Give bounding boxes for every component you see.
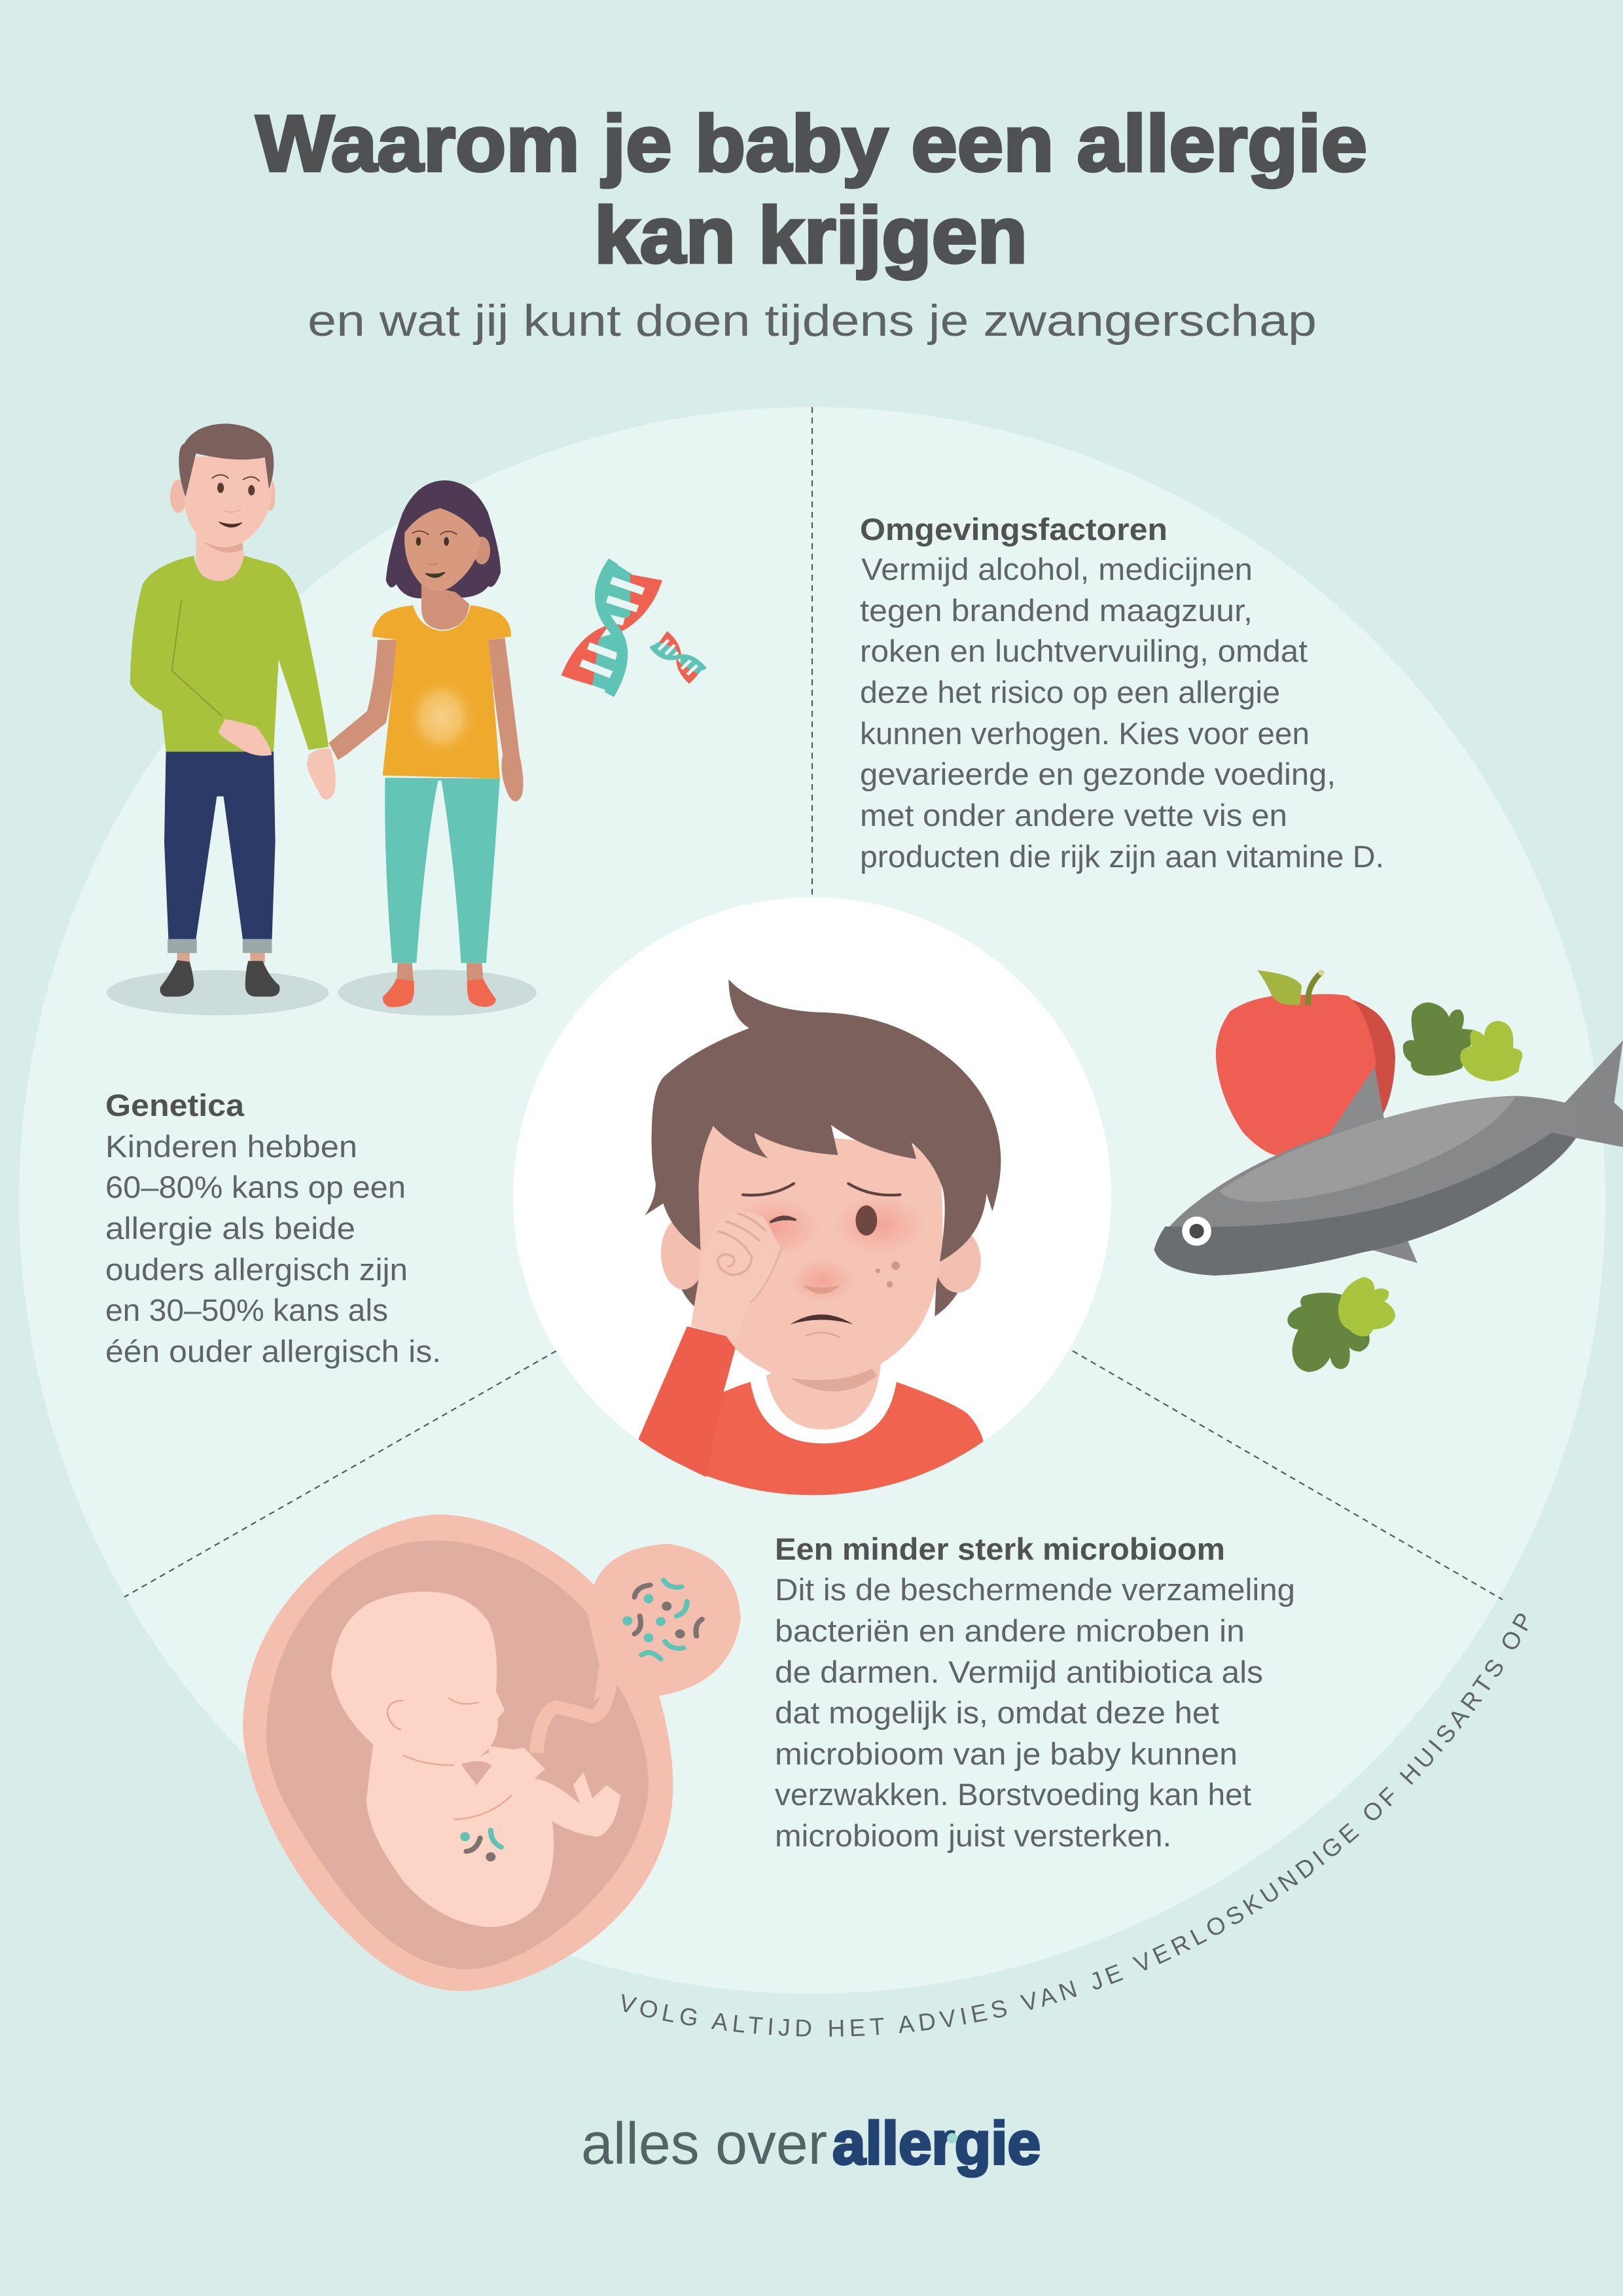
central white circle [513, 897, 1111, 1496]
fetus [331, 1592, 620, 1927]
text block: microbioom: microbioom van je baby kunnen [775, 1736, 1238, 1771]
face [698, 1126, 942, 1380]
microbes in bubble [622, 1580, 702, 1659]
womb inner [266, 1541, 649, 1969]
text block: Genetica: en 30–50% kans als [105, 1293, 388, 1327]
icon: large DNA [562, 560, 662, 694]
hair [645, 979, 1001, 1262]
large background circle [19, 407, 1605, 1994]
man [130, 423, 336, 997]
woman [329, 480, 523, 1007]
text block: Omgevingsfactoren: producten die rijk zijn aan vitamine D. [860, 839, 1384, 874]
eyebrows and eyes [743, 1183, 901, 1236]
hand [691, 1211, 781, 1339]
microbes in belly [460, 1830, 501, 1861]
text block: Genetica: één ouder allergisch is. [105, 1334, 441, 1369]
segment dividers [124, 407, 1503, 1600]
text block: microbioom: Een minder sterk microbioom [775, 1532, 1225, 1566]
logo: allergie [832, 2110, 1041, 2177]
text block: Omgevingsfactoren: deze het risico op een allergie [860, 675, 1280, 709]
text block: Omgevingsfactoren: tegen brandend maagzuur, [860, 593, 1253, 628]
text block: Genetica: allergie als beide [105, 1211, 355, 1246]
text block: microbioom: microbioom juist versterken. [775, 1818, 1171, 1853]
title: kan krijgen [594, 190, 1027, 279]
text block: microbioom: de darmen. Vermijd antibiotica als [775, 1655, 1263, 1689]
text block: Omgevingsfactoren [860, 512, 1384, 874]
text block: Omgevingsfactoren: Omgevingsfactoren [860, 512, 1168, 547]
text block: Omgevingsfactoren: roken en luchtvervuiling, omdat [860, 634, 1308, 668]
illustration: fetus in womb with microbiome [243, 1515, 741, 1991]
umbilical cord [536, 1684, 610, 1753]
illustration: food [1154, 970, 1623, 1372]
text block: Omgevingsfactoren: met onder andere vette vis en [860, 798, 1287, 833]
collar [724, 1354, 897, 1443]
nose and mouth [790, 1286, 853, 1337]
back hair [675, 1271, 965, 1316]
title [256, 99, 1367, 279]
ground shadows [107, 970, 537, 1016]
text block: Omgevingsfactoren: gevarieerde en gezonde voeding, [860, 757, 1336, 791]
illustration: boy rubbing eye [638, 979, 1001, 1495]
neck [764, 1362, 881, 1429]
text block: microbioom: bacteriën en andere microben in [775, 1613, 1245, 1648]
curved note: VOLG ALTIJD HET ADVIES VAN JE VERLOSKUNDIGE OF HUISARTS OP [622, 1613, 1527, 2037]
womb outer [243, 1515, 741, 1991]
irritated skin [729, 1196, 925, 1302]
ears [661, 1217, 981, 1293]
title: Waarom je baby een allergie [256, 99, 1367, 188]
red sweater [638, 1326, 984, 1495]
text block: microbioom: Dit is de beschermende verzameling [775, 1572, 1295, 1607]
apple [1216, 970, 1395, 1156]
herbs upper [1403, 1003, 1522, 1081]
icon: small DNA [642, 628, 713, 687]
text block: Genetica [105, 1088, 441, 1369]
illustration: parents [107, 423, 713, 1016]
text block: Genetica: 60–80% kans op een [105, 1170, 406, 1204]
text block: Genetica: Genetica [105, 1088, 245, 1122]
logo: alles over [581, 2111, 827, 2177]
text block: Genetica: Kinderen hebben [105, 1129, 357, 1164]
text block: Genetica: ouders allergisch zijn [105, 1252, 408, 1287]
text block: microbioom: dat mogelijk is, omdat deze het [775, 1695, 1219, 1730]
herbs lower [1287, 1277, 1395, 1372]
text block: Omgevingsfactoren: Vermijd alcohol, medicijnen [861, 552, 1253, 586]
text block: microbioom [775, 1532, 1295, 1853]
logo [581, 2110, 1041, 2177]
text block: microbioom: verzwakken. Borstvoeding kan het [775, 1777, 1251, 1812]
freckles [876, 1261, 900, 1287]
fish [1154, 1041, 1623, 1276]
text block: Omgevingsfactoren: kunnen verhogen. Kies voor een [860, 716, 1310, 751]
subtitle: en wat jij kunt doen tijdens je zwangerschap [308, 296, 1317, 346]
